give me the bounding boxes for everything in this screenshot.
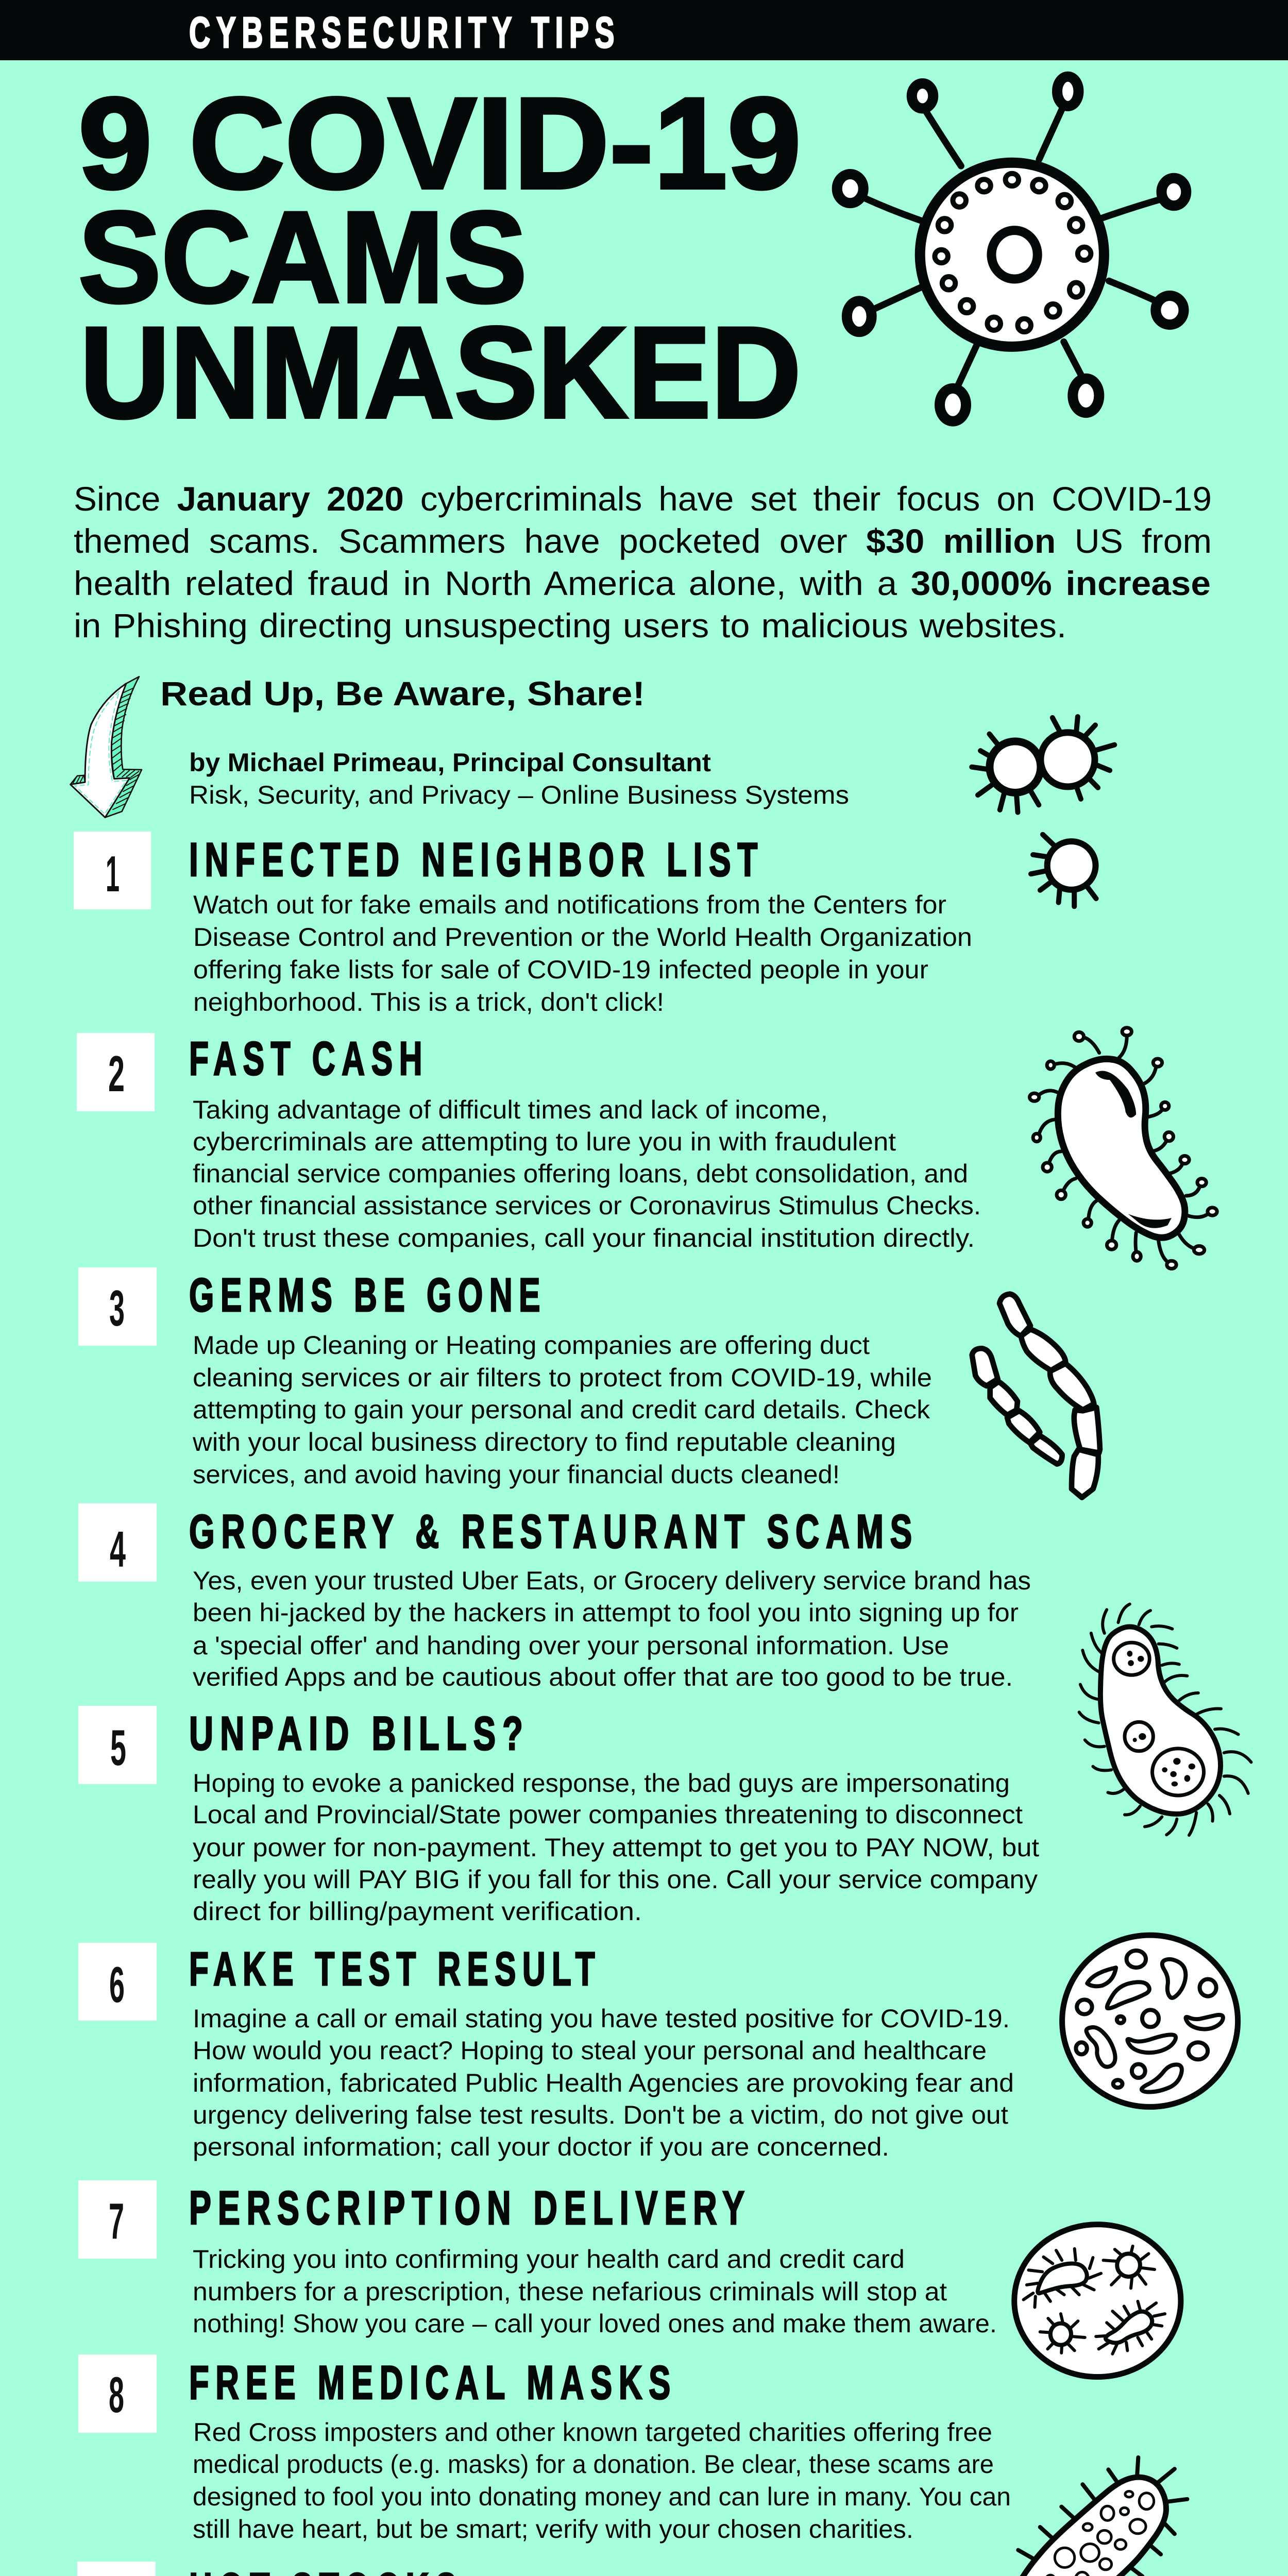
- heading 8: FREE MEDICAL MASKS: [189, 2357, 677, 2409]
- heading 3: GERMS BE GONE: [189, 1269, 547, 1321]
- number badge 5: 5: [110, 1719, 126, 1776]
- body 6: [193, 2004, 1014, 2161]
- heading 7: PERSCRIPTION DELIVERY: [189, 2182, 751, 2234]
- body 3: attempting to gain your personal and credit card details. Check: [193, 1395, 930, 1424]
- body 6: personal information; call your doctor if you are concerned.: [193, 2132, 889, 2161]
- intro paragraph: [74, 480, 1212, 645]
- body 4: [193, 1566, 1031, 1691]
- body 5: direct for billing/payment verification.: [193, 1897, 642, 1926]
- body 6: How would you react? Hoping to steal your personal and healthcare: [193, 2036, 987, 2065]
- body 2: Taking advantage of difficult times and lack of income,: [193, 1095, 828, 1124]
- icon: rod bacterium with spots: [990, 2458, 1187, 2576]
- body 4: a 'special offer' and handing over your personal information. Use: [193, 1631, 949, 1660]
- item 4: [78, 1503, 1031, 1691]
- body 8: still have heart, but be smart; verify with your chosen charities.: [193, 2515, 913, 2544]
- intro paragraph: themed scams. Scammers have pocketed over $30 million US from: [74, 522, 1212, 560]
- body 7: [193, 2245, 997, 2338]
- number badge 3: 3: [109, 1280, 125, 1336]
- icon: round plate of bacteria: [1062, 1935, 1238, 2107]
- title: 9 COVID-19: [78, 71, 801, 216]
- icon: large virus: [837, 77, 1186, 421]
- item 9: [77, 2562, 830, 2576]
- heading 5: UNPAID BILLS?: [189, 1707, 530, 1760]
- body 2: Don't trust these companies, call your financial institution directly.: [193, 1224, 975, 1252]
- icon: single spiky cell: [1031, 835, 1096, 906]
- item 5: [78, 1706, 1039, 1926]
- body 1: Watch out for fake emails and notifications from the Centers for: [193, 890, 946, 919]
- number badge 2: 2: [108, 1045, 125, 1102]
- intro paragraph: Since January 2020 cybercriminals have set their focus on COVID-19: [74, 480, 1212, 518]
- body 7: Tricking you into confirming your health card and credit card: [193, 2245, 905, 2274]
- icon: bacteria chains: [972, 1294, 1100, 1498]
- number badge 6: 6: [109, 1956, 125, 2013]
- heading 1: INFECTED NEIGHBOR LIST: [189, 834, 764, 886]
- body 8: [193, 2418, 1011, 2544]
- number badge 1: [74, 832, 151, 909]
- body 5: Local and Provincial/State power companies threatening to disconnect: [193, 1800, 1023, 1829]
- banner label: CYBERSECURITY TIPS: [189, 8, 620, 57]
- number badge 4: [78, 1503, 157, 1582]
- body 5: Hoping to evoke a panicked response, the bad guys are impersonating: [193, 1769, 1010, 1798]
- body 1: offering fake lists for sale of COVID-19 infected people in your: [193, 955, 928, 984]
- body 2: cybercriminals are attempting to lure you in with fraudulent: [193, 1127, 896, 1156]
- body 6: Imagine a call or email stating you have tested positive for COVID-19.: [193, 2004, 1010, 2033]
- body 1: [193, 890, 972, 1016]
- body 3: [192, 1331, 932, 1489]
- icon: bacterium with flagella: [1029, 1028, 1217, 1269]
- item 7: [78, 2180, 997, 2338]
- number badge 5: [78, 1706, 157, 1784]
- item 8: [78, 2354, 1011, 2544]
- body 7: nothing! Show you care – call your loved ones and make them aware.: [193, 2309, 997, 2338]
- number badge 2: [77, 1033, 155, 1111]
- number badge 3: [78, 1267, 157, 1346]
- body 8: Red Cross imposters and other known targeted charities offering free: [193, 2418, 992, 2447]
- body 4: Yes, even your trusted Uber Eats, or Grocery delivery service brand has: [193, 1566, 1031, 1595]
- body 3: services, and avoid having your financial ducts cleaned!: [193, 1460, 840, 1489]
- number badge 7: 7: [109, 2193, 124, 2249]
- top banner: [0, 0, 1288, 60]
- body 2: other financial assistance services or Coronavirus Stimulus Checks.: [193, 1191, 981, 1220]
- body 2: financial service companies offering loans, debt consolidation, and: [193, 1159, 968, 1188]
- heading 2: FAST CASH: [189, 1032, 429, 1085]
- number badge 8: 8: [109, 2366, 124, 2423]
- number badge 4: 4: [110, 1521, 126, 1578]
- number badge 6: [78, 1943, 157, 2021]
- item 3: [78, 1267, 932, 1489]
- byline: by Michael Primeau, Principal Consultant: [189, 748, 711, 777]
- body 4: been hi-jacked by the hackers in attempt to fool you into signing up for: [193, 1598, 1019, 1627]
- icon: hairy bacterium: [1079, 1604, 1251, 1835]
- body 3: with your local business directory to find reputable cleaning: [192, 1428, 896, 1456]
- body 2: [193, 1095, 981, 1252]
- subheading: Read Up, Be Aware, Share!: [160, 674, 645, 713]
- body 1: Disease Control and Prevention or the World Health Organization: [193, 923, 972, 952]
- item 1: [74, 832, 972, 1016]
- byline: [189, 748, 849, 809]
- body 4: verified Apps and be cautious about offer that are too good to be true.: [193, 1663, 1013, 1691]
- byline: Risk, Security, and Privacy – Online Business Systems: [189, 781, 849, 809]
- number badge 9: [77, 2562, 156, 2576]
- body 6: information, fabricated Public Health Agencies are provoking fear and: [193, 2069, 1014, 2097]
- title: UNMASKED: [80, 300, 801, 445]
- intro paragraph: health related fraud in North America alone, with a 30,000% increase: [74, 564, 1211, 602]
- icon: plate of spiky germs: [1014, 2225, 1181, 2377]
- number badge 7: [78, 2180, 157, 2259]
- heading 4: GROCERY & RESTAURANT SCAMS: [189, 1505, 919, 1558]
- icon: down arrow: [71, 676, 142, 818]
- icon: two spiky cells: [972, 717, 1114, 812]
- body 8: designed to fool you into donating money and can lure in many. You can: [193, 2482, 1011, 2511]
- body 1: neighborhood. This is a trick, don't click!: [193, 988, 664, 1016]
- body 3: Made up Cleaning or Heating companies are offering duct: [193, 1331, 870, 1360]
- body 6: urgency delivering false test results. Don't be a victim, do not give out: [193, 2100, 1008, 2129]
- number badge 1: 1: [106, 845, 120, 902]
- body 5: your power for non-payment. They attempt to get you to PAY NOW, but: [193, 1833, 1039, 1862]
- body 3: cleaning services or air filters to protect from COVID-19, while: [193, 1363, 932, 1392]
- body 5: [193, 1769, 1039, 1926]
- number badge 8: [78, 2354, 157, 2433]
- heading 6: FAKE TEST RESULT: [189, 1943, 601, 1995]
- item 2: [77, 1032, 981, 1252]
- item 6: [78, 1943, 1014, 2161]
- title: SCAMS: [78, 185, 527, 330]
- body 5: really you will PAY BIG if you fall for this one. Call your service company: [193, 1865, 1038, 1894]
- intro paragraph: in Phishing directing unsuspecting users to malicious websites.: [74, 606, 1066, 645]
- body 8: medical products (e.g. masks) for a donation. Be clear, these scams are: [193, 2450, 994, 2479]
- title: [78, 71, 801, 445]
- body 7: numbers for a prescription, these nefarious criminals will stop at: [193, 2277, 947, 2306]
